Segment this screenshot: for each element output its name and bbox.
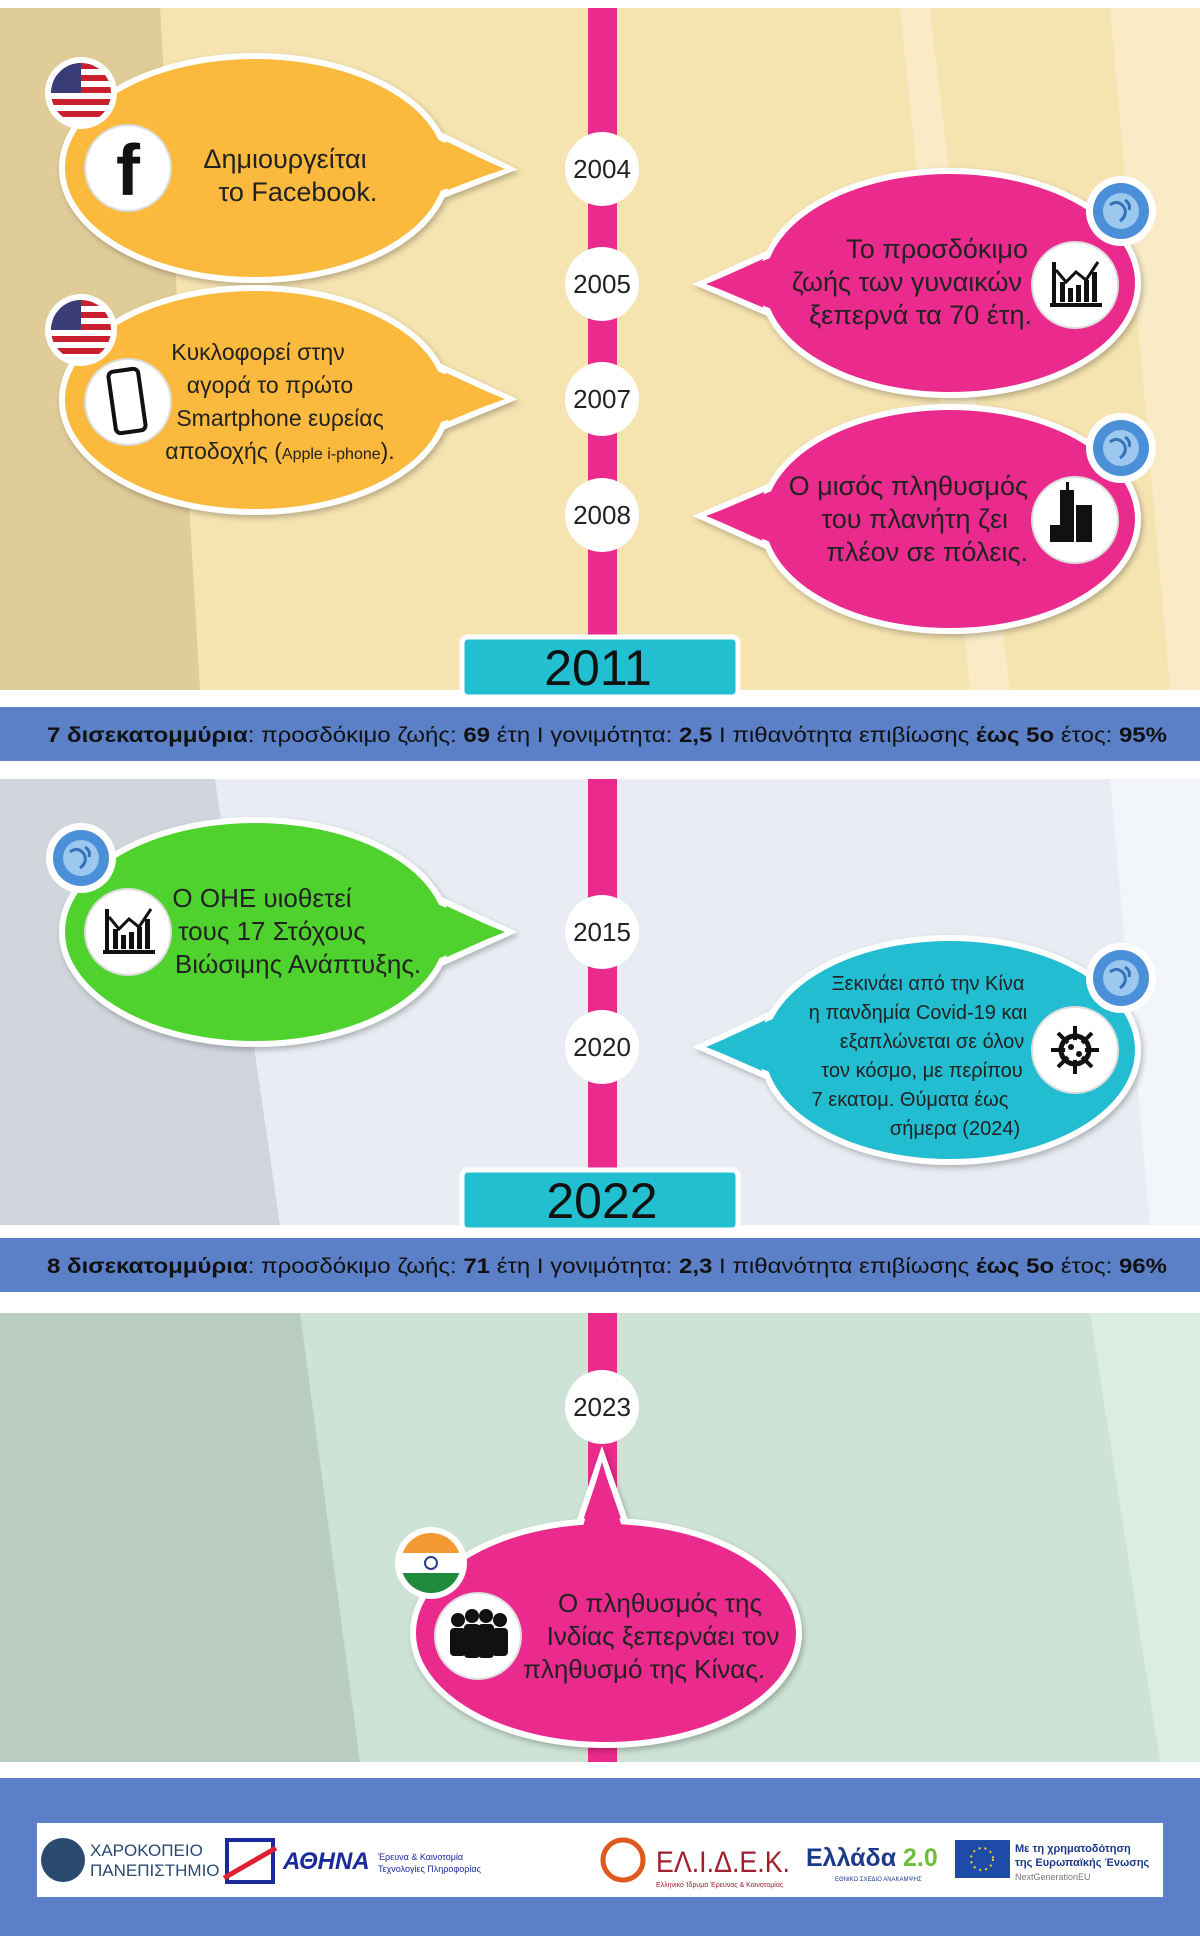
icon: crowd	[435, 1593, 521, 1679]
year 2007	[565, 362, 639, 436]
icon: city	[1032, 477, 1118, 563]
logo: Ellada 2.0: ΕΘΝΙΚΟ ΣΧΕΔΙΟ ΑΝΑΚΑΜΨΗΣ	[835, 1877, 922, 1883]
bubble: facebook 2004: Δημιουργείται	[203, 144, 367, 174]
bubble: covid 2020: σήμερα (2024)	[890, 1118, 1020, 1140]
logo: Athena: ΑΘΗΝΑ	[282, 1848, 370, 1875]
year box 2022: 2022	[546, 1173, 658, 1229]
stats bar 2022: 8 δισεκατομμύρια : προσδόκιμο ζωής: 71 έτη I γονιμότητα: 2,3 I πιθανότητα επιβίωσης έως 5ο έτος: 96%	[47, 1255, 1167, 1278]
bubble: smartphone 2007	[45, 288, 510, 512]
logo: ELIDEK	[603, 1840, 790, 1889]
year 2020	[565, 1010, 639, 1084]
logo: Athena: Τεχνολογίες Πληροφορίας	[378, 1864, 482, 1874]
icon: UN globe	[1086, 943, 1156, 1013]
logo: EU: Με τη χρηματοδότηση	[1015, 1843, 1131, 1855]
year 2020: 2020	[573, 1032, 631, 1062]
icon: UN globe	[1086, 413, 1156, 483]
timeline bars	[588, 8, 617, 1762]
bubble: SDGs 2015: Ο ΟΗΕ υιοθετεί	[172, 883, 352, 913]
logo: ELIDEK: ΕΛ.Ι.Δ.Ε.Κ.	[656, 1846, 790, 1879]
bubble: half urban 2008: του πλανήτη ζει	[821, 504, 1008, 534]
bubble: SDGs 2015	[46, 820, 510, 1044]
logo: Athena	[224, 1840, 482, 1882]
bubble: smartphone 2007: αγορά το πρώτο	[187, 372, 353, 398]
logo: Harokopio	[41, 1838, 220, 1882]
bubble: facebook 2004	[45, 56, 510, 280]
bubble: half urban 2008	[700, 407, 1156, 631]
bubble: women life expectancy 2005	[700, 171, 1156, 395]
logo: Ellada 2.0: Ελλάδα 2.0	[806, 1844, 938, 1872]
icon: US flag	[45, 294, 117, 366]
bubble: India 2023: Ινδίας ξεπερνάει τον	[547, 1621, 779, 1651]
bubble: covid 2020: εξαπλώνεται σε όλον	[840, 1031, 1024, 1053]
logo: Athena: Έρευνα & Καινοτομία	[377, 1852, 463, 1862]
year box 2011	[462, 637, 738, 697]
icon: virus	[1032, 1007, 1118, 1093]
bubble: India 2023	[395, 1455, 799, 1745]
year 2015	[565, 895, 639, 969]
icon: India flag	[395, 1527, 467, 1599]
stats bar 2011	[0, 707, 1200, 761]
year 2023	[565, 1370, 639, 1444]
year 2004	[565, 132, 639, 206]
bubble: half urban 2008: Ο μισός πληθυσμός	[789, 471, 1028, 501]
icon: smartphone	[85, 359, 171, 445]
bubble: half urban 2008: πλέον σε πόλεις.	[826, 537, 1028, 567]
year box 2011: 2011	[544, 640, 652, 696]
year 2008: 2008	[573, 500, 631, 530]
icon: chart	[1032, 242, 1118, 328]
logo: EU: NextGenerationEU	[1015, 1872, 1091, 1882]
logo: EU: της Ευρωπαϊκής Ένωσης	[1015, 1857, 1150, 1869]
year 2015: 2015	[573, 917, 631, 947]
bubble: India 2023: πληθυσμό της Κίνας.	[523, 1654, 765, 1684]
bubble: women life expectancy 2005: ξεπερνά τα 70 έτη.	[809, 300, 1032, 330]
icon: UN globe	[1086, 176, 1156, 246]
bubble: smartphone 2007: Smartphone ευρείας	[176, 405, 384, 431]
year circles	[565, 132, 639, 1444]
logo: ELIDEK: Ελληνικό Ίδρυμα Έρευνας & Καινοτομίας	[656, 1881, 784, 1889]
bubble: covid 2020: τον κόσμο, με περίπου	[821, 1060, 1023, 1082]
bubble: women life expectancy 2005: Το προσδόκιμο	[846, 234, 1028, 264]
icon: US flag	[45, 57, 117, 129]
bubble: covid 2020: η πανδημία Covid-19 και	[809, 1002, 1027, 1024]
stats bar 2022	[0, 1238, 1200, 1292]
section 1 background	[0, 8, 1200, 690]
bubble: smartphone 2007: αποδοχής (Apple i-phone).	[165, 438, 395, 464]
icon: UN globe	[46, 823, 116, 893]
icon: facebook	[85, 125, 171, 211]
stats bar 2011: 7 δισεκατομμύρια : προσδόκιμο ζωής: 69 έτη I γονιμότητα: 2,5 I πιθανότητα επιβίωσης έως 5ο έτος: 95%	[47, 724, 1167, 747]
year 2004: 2004	[573, 154, 631, 184]
footer	[0, 1778, 1200, 1936]
year 2005	[565, 247, 639, 321]
section 2 background	[0, 779, 1200, 1225]
bubble: SDGs 2015: τους 17 Στόχους	[178, 916, 366, 946]
year box 2022	[462, 1170, 738, 1230]
bubble: smartphone 2007: Κυκλοφορεί στην	[171, 339, 345, 365]
year 2007: 2007	[573, 384, 631, 414]
logo: Harokopio: ΠΑΝΕΠΙΣΤΗΜΙΟ	[90, 1861, 220, 1880]
bubble: women life expectancy 2005: ζωής των γυναικών	[792, 267, 1022, 297]
bubble: covid 2020	[700, 938, 1156, 1162]
bubble: covid 2020: 7 εκατομ. Θύματα έως	[812, 1089, 1009, 1111]
bubble: SDGs 2015: Βιώσιμης Ανάπτυξης.	[175, 949, 421, 979]
section 3 background	[0, 1313, 1200, 1762]
year 2005: 2005	[573, 269, 631, 299]
bubble: facebook 2004: το Facebook.	[219, 177, 377, 207]
bubble: India 2023: Ο πληθυσμός της	[558, 1588, 762, 1618]
year 2023: 2023	[573, 1392, 631, 1422]
logo: Harokopio: ΧΑΡΟΚΟΠΕΙΟ	[90, 1841, 203, 1860]
year 2008	[565, 478, 639, 552]
bubble: covid 2020: Ξεκινάει από την Κίνα	[832, 973, 1024, 995]
icon: chart	[85, 889, 171, 975]
logo: EU	[955, 1840, 1150, 1882]
icon: facebook: f	[116, 131, 141, 211]
